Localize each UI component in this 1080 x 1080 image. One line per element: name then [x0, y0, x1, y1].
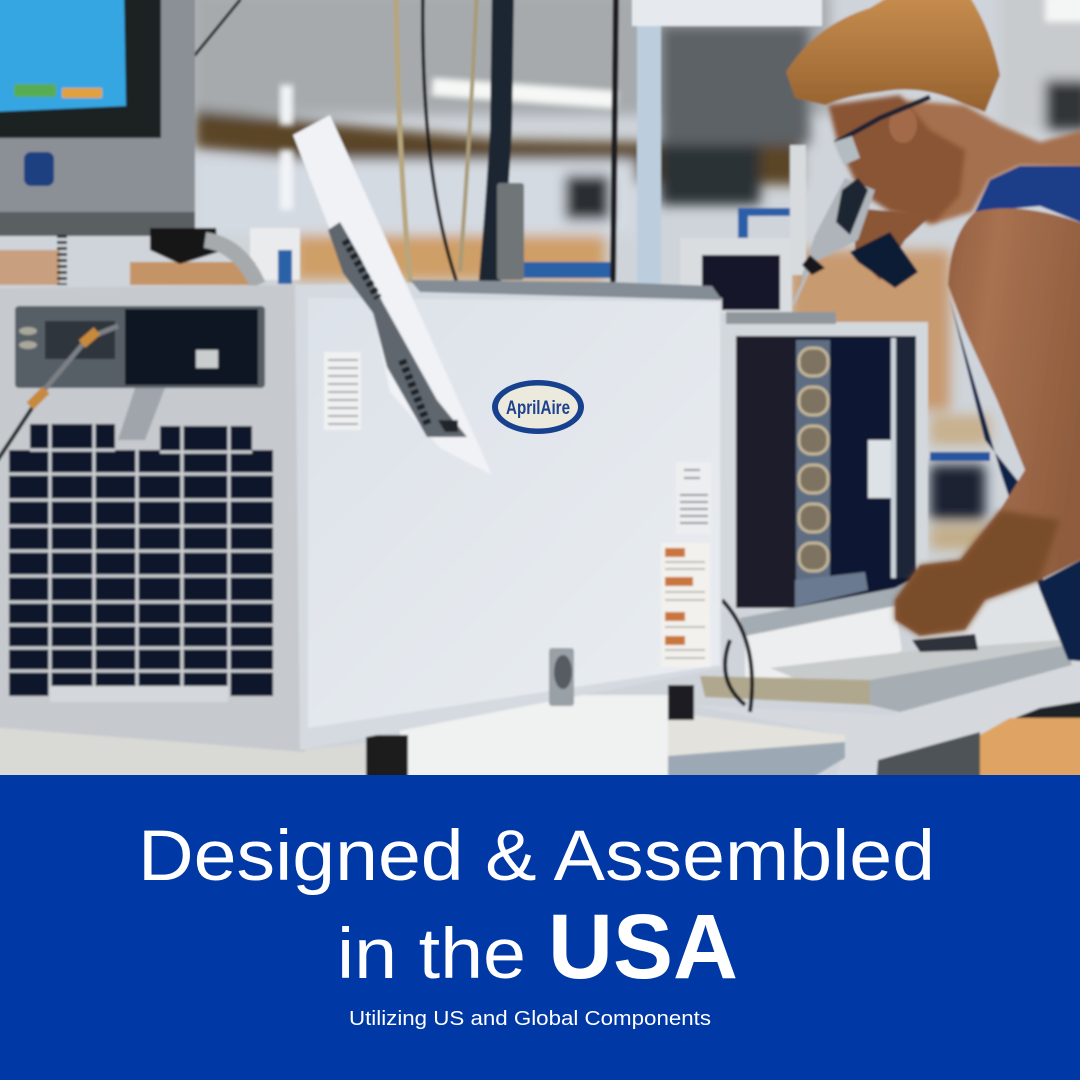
grille: [9, 424, 273, 702]
opened dehumidifier chassis: [722, 312, 928, 640]
heading line two: USA: [548, 896, 738, 998]
side panel with grille: [0, 285, 305, 752]
front panel: [295, 283, 722, 750]
torso: [950, 300, 1080, 662]
wire probe: [0, 405, 34, 464]
warning label: [324, 352, 361, 430]
tank strap: [975, 166, 1080, 226]
factory background: [0, 0, 1080, 785]
drain fitting: [549, 648, 574, 706]
dehumidifier unit: [0, 115, 722, 752]
subheading: Utilizing US and Global Components: [349, 1008, 711, 1030]
arm and hand: [895, 208, 1080, 636]
power screwdriver: [793, 178, 932, 305]
hanging cables: [195, 0, 616, 280]
heading line two: in the: [337, 915, 526, 994]
control strip: [15, 306, 265, 388]
ear: [889, 107, 917, 143]
AprilAire logo: [492, 380, 584, 434]
control monitor: [0, 0, 195, 236]
peeled protective film: [293, 115, 492, 475]
technician: [786, 0, 1080, 662]
heading line one: Designed & Assembled: [138, 817, 935, 896]
AprilAire logo: AprilAire: [506, 398, 570, 419]
neck and back: [880, 100, 1080, 225]
work table: [0, 578, 1080, 785]
heading line two: [337, 896, 738, 998]
side labels: [676, 462, 711, 534]
face: [828, 95, 965, 222]
blue banner: [0, 775, 1080, 1080]
photo base fill: [0, 0, 1080, 775]
panel shadow: [118, 388, 165, 440]
monitor stand and cables: [0, 228, 258, 285]
hair: [786, 0, 1000, 112]
photo: technician assembling AprilAire dehumidifier in factory: [0, 0, 1080, 775]
glasses: [835, 97, 930, 143]
